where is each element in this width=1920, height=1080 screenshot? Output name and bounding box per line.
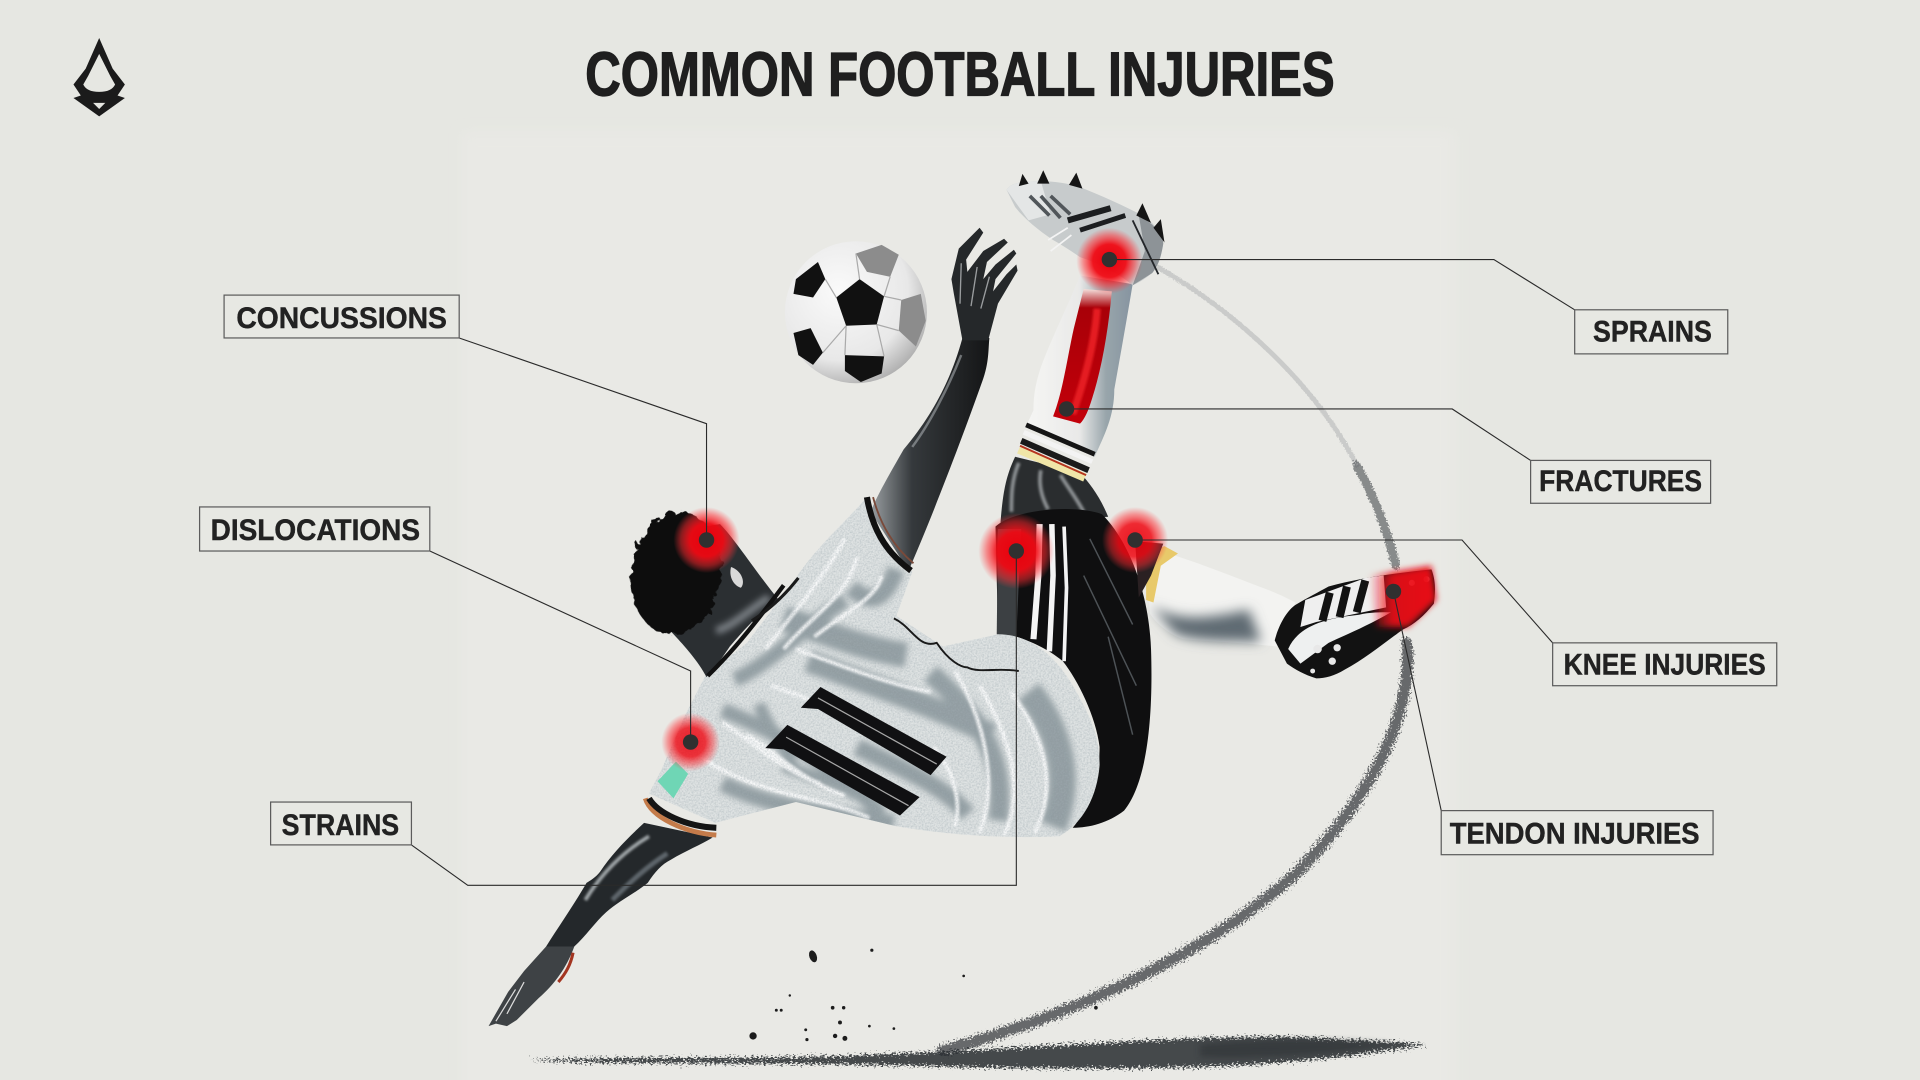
label: knee injuries: KNEE INJURIES	[1564, 649, 1766, 682]
logo	[73, 38, 125, 116]
lower boot	[1275, 569, 1435, 678]
jersey side seam	[894, 618, 1019, 671]
injury glow: thigh	[978, 513, 1054, 589]
label: concussions: CONCUSSIONS	[236, 302, 447, 335]
jersey fold shading	[722, 569, 1062, 827]
green armband	[658, 762, 688, 798]
shorts	[996, 509, 1151, 828]
raised lower leg and sock	[1019, 276, 1133, 478]
lower arm and hand	[489, 823, 713, 1026]
right sleeve band	[867, 497, 913, 571]
shorts stripes	[1033, 524, 1067, 661]
jersey grain	[650, 502, 1100, 837]
injured shin highlight	[1053, 289, 1112, 424]
dirt splatter	[749, 949, 1098, 1041]
raised boot	[1007, 170, 1164, 285]
injury glow: boot	[1369, 566, 1436, 627]
label: fractures: FRACTURES	[1539, 465, 1702, 498]
leader line: tendon injuries	[1393, 591, 1441, 811]
injury glow: ankle	[1076, 228, 1142, 294]
soccer ball	[785, 241, 927, 383]
title: COMMON FOOTBALL INJURIES	[585, 40, 1335, 110]
head and hair	[623, 506, 798, 677]
label: strains: STRAINS	[282, 809, 399, 842]
upper arm and hand	[871, 228, 1018, 571]
sock cuff stripes	[1019, 425, 1095, 478]
leader line: dislocations	[430, 551, 691, 742]
raised thigh	[1000, 457, 1108, 524]
leader line: knee injuries	[1135, 540, 1553, 643]
lower leg and sock	[1135, 541, 1296, 647]
injury glow: head	[673, 507, 740, 573]
injury glow: shoulder	[661, 713, 720, 771]
photo backdrop	[463, 132, 1455, 1080]
jersey number 11	[765, 687, 947, 816]
left sleeve band	[645, 798, 716, 835]
ground shadow	[527, 1037, 1427, 1068]
label: tendon injuries: TENDON INJURIES	[1450, 818, 1700, 851]
label: sprains: SPRAINS	[1593, 316, 1712, 349]
jersey	[637, 490, 1114, 845]
marker dots	[683, 252, 1401, 750]
label: sprains	[1575, 310, 1728, 354]
leader line: strains	[411, 551, 1016, 885]
label: dislocations: DISLOCATIONS	[211, 514, 420, 547]
leader line: fractures	[1067, 409, 1531, 460]
injury glow: knee	[1102, 507, 1168, 573]
leader line: sprains	[1109, 260, 1575, 310]
motion trail	[943, 267, 1408, 1051]
leader line: concussions	[459, 338, 707, 540]
